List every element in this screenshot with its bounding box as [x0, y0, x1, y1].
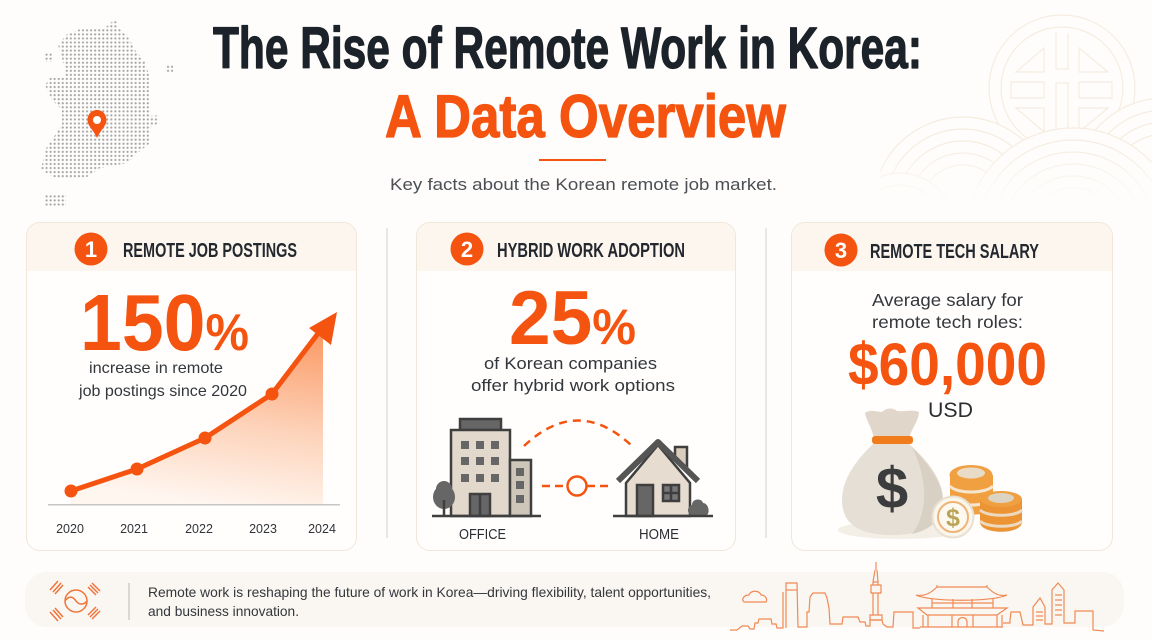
title underline	[539, 159, 606, 161]
card 3 heading: 3	[835, 238, 847, 263]
stat: 150%: 150%	[80, 278, 249, 367]
panel: hybrid work adoption card	[416, 222, 736, 551]
icon: money bag: $	[876, 456, 908, 521]
connection: office to home	[524, 420, 632, 496]
stat: $60,000: $60,000	[848, 331, 1047, 398]
stat: 25%: 25%	[509, 276, 636, 361]
line chart: 2024	[308, 522, 336, 536]
icon: coins	[932, 465, 1022, 538]
panel: footer band	[25, 572, 1124, 627]
title: A Data Overview	[385, 83, 786, 150]
card 1 heading: REMOTE JOB POSTINGS	[123, 240, 297, 262]
text: footer message: Remote work is reshaping the future of work in Korea—driving flexibility, talent opportunities,	[148, 584, 711, 600]
text: postings description: job postings since 2020	[78, 383, 247, 400]
text: salary description: Average salary for	[872, 290, 1023, 310]
text: hybrid description: offer hybrid work options	[471, 377, 675, 395]
card 2 heading: 2	[461, 237, 473, 262]
line chart	[48, 312, 340, 536]
line chart: 2023	[249, 522, 277, 536]
decoration: korean lattice and wave pattern	[880, 14, 1152, 188]
title	[213, 16, 922, 150]
line chart: 2021	[120, 522, 148, 536]
icon: taegeuk emblem with trigrams	[50, 581, 100, 621]
line chart: 2022	[185, 522, 213, 536]
text: footer message: and business innovation.	[148, 603, 299, 619]
icon: dotted Korea map with pin	[41, 19, 173, 206]
text: postings description	[78, 360, 247, 400]
icon: office building	[432, 419, 541, 516]
illustration: Seoul skyline	[730, 562, 1104, 631]
icon: money bag	[838, 408, 962, 539]
line chart: 2020	[56, 522, 84, 536]
text: salary description: remote tech roles:	[872, 312, 1023, 332]
panel: remote tech salary card	[791, 222, 1113, 551]
icon: house	[613, 442, 713, 516]
panel: remote job postings card	[26, 222, 357, 551]
card 3 heading: REMOTE TECH SALARY	[870, 241, 1039, 263]
labels: office and home	[459, 526, 679, 543]
card 2 heading: HYBRID WORK ADOPTION	[497, 240, 685, 262]
subtitle: Key facts about the Korean remote job market.	[390, 175, 777, 194]
text: footer message	[148, 584, 711, 619]
text: USD: USD	[928, 399, 973, 422]
card 1 heading: 1	[85, 237, 97, 262]
icon: coins: $	[946, 504, 960, 532]
text: salary description	[872, 290, 1023, 332]
text: hybrid description: of Korean companies	[484, 355, 657, 373]
card 2 heading	[450, 232, 685, 266]
card 3 heading	[824, 234, 1039, 266]
text: hybrid description	[471, 355, 675, 395]
card 1 heading	[74, 232, 297, 266]
labels: office and home: OFFICE	[459, 526, 506, 543]
text: postings description: increase in remote	[89, 360, 223, 377]
labels: office and home: HOME	[639, 526, 679, 543]
